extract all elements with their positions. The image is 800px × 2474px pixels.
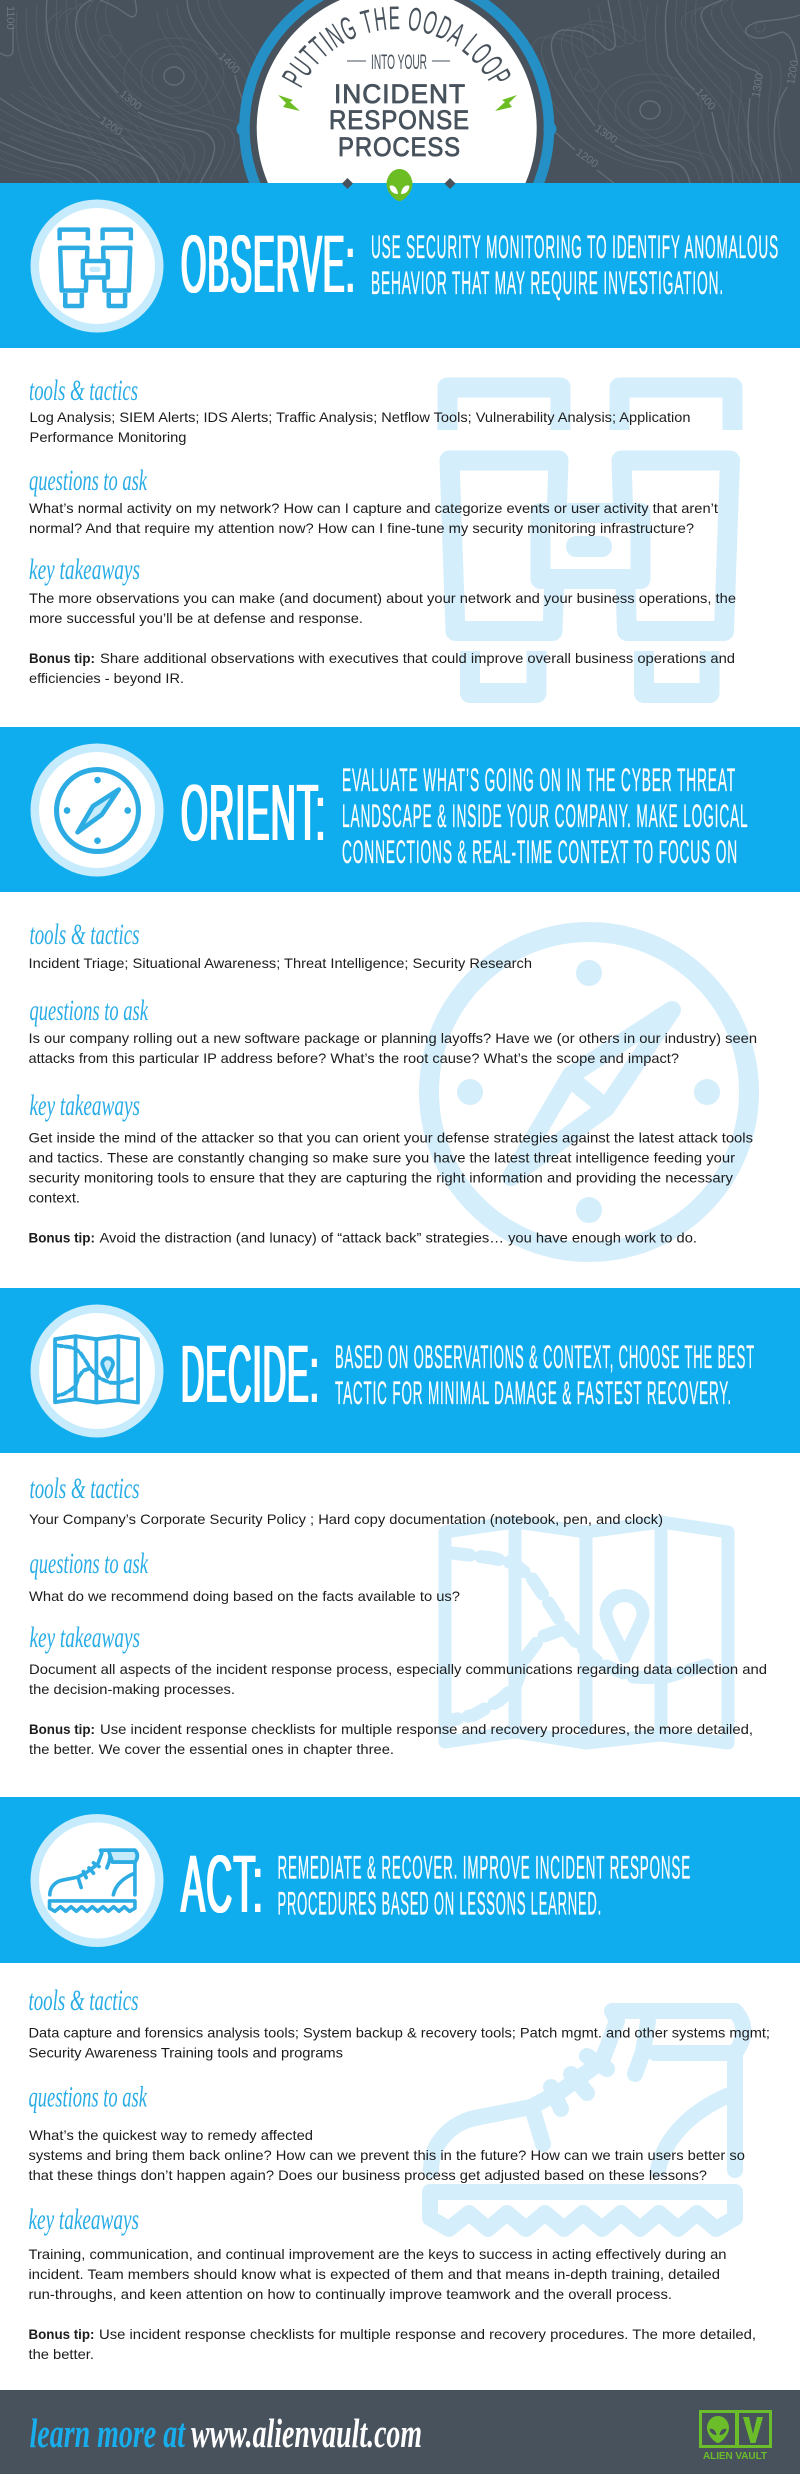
icon: right lightning bolt — [495, 95, 517, 111]
title: into your: INTO YOUR — [371, 51, 427, 74]
orient: key takeaways: security monitoring tools to ensure that they are capturing the right information and providing the necessary — [28, 1170, 733, 1186]
orient: questions to ask — [28, 994, 757, 1066]
panel: orient — [0, 727, 800, 1252]
decide: tools and tactics — [29, 1472, 663, 1527]
title: incident response process: PROCESS — [338, 132, 461, 162]
act: questions to ask: What’s the quickest way to remedy affected — [29, 2127, 313, 2143]
contour labels: 1200 — [97, 115, 124, 139]
observe: tools and tactics — [29, 374, 690, 445]
contour labels — [4, 6, 800, 171]
decide: bonus tip: Use incident response checklists for multiple response and recovery procedures, the more detailed, — [100, 1721, 753, 1737]
title: incident response process — [329, 79, 470, 162]
orient: key takeaways: context. — [28, 1190, 80, 1206]
decide band — [0, 1288, 800, 1453]
footer: learn more link — [30, 2410, 422, 2456]
panel: decide: DECIDE: — [181, 1329, 320, 1420]
act: key takeaways: incident. Team members should know what is expected of them and that means in-depth training, detailed — [28, 2266, 720, 2282]
act: bonus tip: Use incident response checklists for multiple response and recovery procedures. The more detailed, — [99, 2326, 756, 2342]
act: key takeaways: Training, communication, and continual improvement are the keys to success in acting effectively during an — [28, 2246, 726, 2262]
observe: key takeaways: The more observations you can make (and document) about your network and your business operations, the — [29, 590, 736, 606]
decide description — [335, 1339, 755, 1411]
observe: bonus tip: Share additional observations with executives that could improve overall business operations and — [100, 650, 735, 666]
decide: key takeaways — [29, 1621, 767, 1697]
observe: bonus tip: efficiencies - beyond IR. — [29, 670, 184, 686]
footer: learn more link: www.alienvault.com — [191, 2410, 422, 2456]
icon: compass badge — [30, 744, 164, 876]
act: bonus tip: Bonus tip: — [28, 2326, 94, 2342]
observe: bonus tip — [29, 650, 735, 686]
title: incident response process: INCIDENT — [334, 79, 466, 109]
contour labels: 1300 — [592, 123, 619, 147]
observe: key takeaways: more successful you’ll be at defense and response. — [29, 610, 363, 626]
orient: key takeaways — [28, 1089, 753, 1206]
act: key takeaways: key takeaways — [28, 2203, 139, 2236]
contour labels: 1400 — [216, 51, 242, 76]
watermark: boot — [430, 2011, 744, 2229]
observe: questions to ask: What’s normal activity on my network? How can I capture and categorize events or user activity that aren’t — [29, 500, 718, 516]
decide: questions to ask — [29, 1547, 460, 1604]
observe: tools and tactics: tools & tactics — [29, 374, 138, 407]
observe: tools and tactics: Performance Monitoring — [30, 429, 186, 445]
orient: questions to ask: attacks from this particular IP address before? What’s the root cause? What’s the scope and impact? — [28, 1050, 679, 1066]
panel: decide — [0, 1288, 800, 1757]
panel: act: ACT: — [181, 1839, 264, 1930]
orient: tools and tactics: tools & tactics — [30, 918, 140, 951]
orient: key takeaways: and tactics. These are constantly changing so make sure you have the latest threat intelligence feeding your — [28, 1150, 735, 1166]
decide: bonus tip — [29, 1721, 753, 1757]
act: questions to ask: systems and bring them back online? How can we prevent this in the future? How can we train users better so — [28, 2147, 745, 2163]
decide: bonus tip: the better. We cover the essential ones in chapter three. — [29, 1741, 394, 1757]
panel: orient: ORIENT: — [181, 768, 326, 857]
observe: questions to ask — [29, 464, 718, 536]
decide: key takeaways: Document all aspects of the incident response process, especially communications regarding data collection and — [29, 1661, 767, 1677]
title: incident response process: RESPONSE — [329, 105, 470, 135]
orient band — [0, 727, 800, 892]
topographic contour background — [0, 0, 800, 195]
watermark: compass — [429, 932, 749, 1252]
orient: key takeaways: Get inside the mind of the attacker so that you can orient your defense strategies against the latest attack tools — [28, 1130, 753, 1146]
act: key takeaways: run-throughs, and keen attention on how to continually improve teamwork and the overall process. — [28, 2286, 672, 2302]
contour labels: 1300 — [750, 72, 766, 99]
act: tools and tactics: Security Awareness Training tools and programs — [28, 2044, 343, 2060]
panel: act — [0, 1797, 800, 2362]
decide: key takeaways: key takeaways — [30, 1621, 140, 1654]
icon: right diamond — [444, 178, 456, 189]
observe: bonus tip: Bonus tip: — [29, 650, 95, 666]
icon: alien head — [386, 169, 412, 201]
act: bonus tip — [28, 2326, 756, 2362]
logo: alien vault — [700, 2411, 770, 2462]
orient: bonus tip: Bonus tip: — [28, 1230, 95, 1246]
observe: tools and tactics: Log Analysis; SIEM Alerts; IDS Alerts; Traffic Analysis; Netflow Tools; Vulnerability Analysis; Application — [30, 409, 690, 425]
act: tools and tactics: Data capture and forensics analysis tools; System backup & recovery tools; Patch mgmt. and other systems mgmt; — [28, 2024, 770, 2040]
observe: key takeaways: key takeaways — [29, 553, 140, 586]
decide: questions to ask: questions to ask — [30, 1547, 148, 1580]
logo: alien vault: ALIEN VAULT — [703, 2451, 767, 2462]
decide: bonus tip: Bonus tip: — [29, 1721, 95, 1737]
watermark: map — [445, 1522, 728, 1743]
observe description — [371, 229, 779, 301]
contour labels: 1200 — [573, 147, 600, 171]
act: questions to ask — [28, 2080, 745, 2183]
footer — [0, 2390, 800, 2474]
act band — [0, 1797, 800, 1963]
contour labels: 1300 — [117, 88, 144, 113]
act description — [278, 1850, 691, 1922]
observe: key takeaways — [29, 553, 736, 626]
title: into your — [347, 51, 450, 74]
icon: map badge — [30, 1304, 164, 1438]
orient: tools and tactics — [28, 918, 532, 971]
decide: key takeaways: the decision-making processes. — [29, 1681, 235, 1697]
contour labels: 1100 — [4, 6, 16, 30]
orient: key takeaways: key takeaways — [30, 1089, 140, 1122]
footer: learn more link: learn more at — [30, 2410, 186, 2456]
act: tools and tactics — [28, 1984, 770, 2060]
orient description — [342, 762, 748, 870]
act: bonus tip: the better. — [28, 2346, 94, 2362]
icon: binoculars badge — [30, 200, 164, 332]
icon: boot badge — [30, 1814, 164, 1947]
orient: tools and tactics: Incident Triage; Situational Awareness; Threat Intelligence; Security Research — [28, 955, 532, 971]
orient: questions to ask: questions to ask — [30, 994, 148, 1027]
panel: observe — [0, 169, 800, 693]
act: questions to ask: that these things don’t happen again? Does our business process get adjusted based on these lessons? — [28, 2167, 707, 2183]
orient: bonus tip: Avoid the distraction (and lunacy) of “attack back” strategies… you have enough work to do. — [100, 1230, 697, 1246]
contour labels: 1400 — [693, 86, 718, 113]
act: key takeaways — [28, 2203, 726, 2302]
icon: left lightning bolt — [278, 95, 300, 111]
observe band — [0, 183, 800, 348]
watermark: binoculars — [448, 388, 732, 693]
observe: questions to ask: normal? And that require my attention now? How can I fine-tune my security monitoring infrastructure? — [29, 520, 694, 536]
title: arc line: PUTTING THE OODA LOOP — [282, 6, 510, 88]
act: tools and tactics: tools & tactics — [28, 1984, 138, 2017]
icon: left diamond — [342, 178, 353, 189]
decide: questions to ask: What do we recommend doing based on the facts available to us? — [29, 1588, 460, 1604]
decide: tools and tactics: tools & tactics — [30, 1472, 140, 1505]
header panel — [0, 0, 800, 183]
title medallion — [236, 0, 556, 280]
decide: tools and tactics: Your Company’s Corporate Security Policy ; Hard copy documentation (notebook, pen, and clock) — [29, 1511, 663, 1527]
act: questions to ask: questions to ask — [28, 2080, 147, 2114]
observe: questions to ask: questions to ask — [29, 464, 147, 497]
panel: observe: OBSERVE: — [181, 219, 356, 310]
orient: questions to ask: Is our company rolling out a new software package or planning layoffs? Have we (or others in our industry) seen — [28, 1030, 757, 1046]
